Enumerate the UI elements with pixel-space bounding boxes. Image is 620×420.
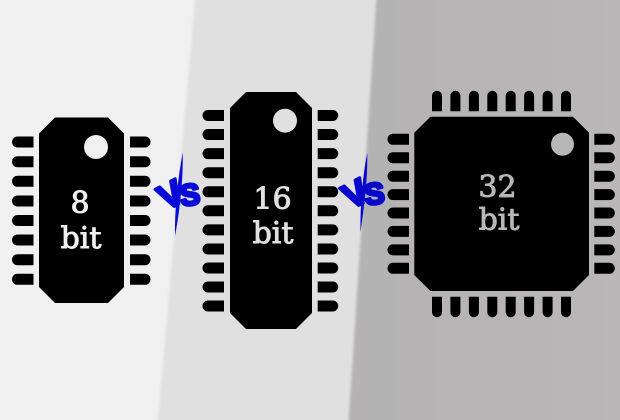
chip 32 bit bottom pins: [432, 297, 571, 317]
chip 8 bit label: [61, 186, 101, 256]
background: middle grey band: [157, 0, 400, 420]
VS letters: S: [363, 177, 386, 212]
chip 16 bit body: [230, 92, 312, 329]
chip 16 bit left pins: [202, 110, 224, 312]
chip: 16 bit: [202, 92, 338, 329]
chip 8 bit label: bit: [61, 221, 101, 256]
VS letters: V: [336, 171, 376, 217]
chip: 8 bit: [12, 118, 150, 303]
VS letters: S: [178, 178, 202, 213]
chip 32 bit label: 32: [478, 170, 517, 205]
chip 8 bit left pins: [12, 136, 34, 285]
slash: [360, 153, 367, 232]
chip 16 bit label: 16: [253, 182, 292, 217]
chip 32 bit right pins: [594, 134, 615, 274]
background: dark right band: [348, 0, 620, 420]
chip 32 bit top pins: [432, 91, 571, 111]
VS letters: V: [152, 172, 191, 218]
slash: [175, 152, 183, 236]
chip 32 bit left pins: [388, 134, 409, 274]
chip 16 bit right pins: [318, 110, 338, 312]
chip 8 bit label: 8: [70, 186, 90, 221]
versus mark 1: [152, 152, 202, 236]
chip 32 bit label: [478, 170, 519, 238]
chip 32 bit body: [414, 117, 589, 291]
chip 32 bit label: bit: [479, 202, 519, 238]
chip 16 bit label: [253, 182, 293, 251]
chip 16 bit label: bit: [253, 216, 293, 251]
chip 8 bit body: [39, 118, 124, 303]
versus mark 2: [336, 153, 386, 232]
chip: 32 bit: [388, 91, 615, 317]
chip 8 bit right pins: [130, 136, 150, 285]
